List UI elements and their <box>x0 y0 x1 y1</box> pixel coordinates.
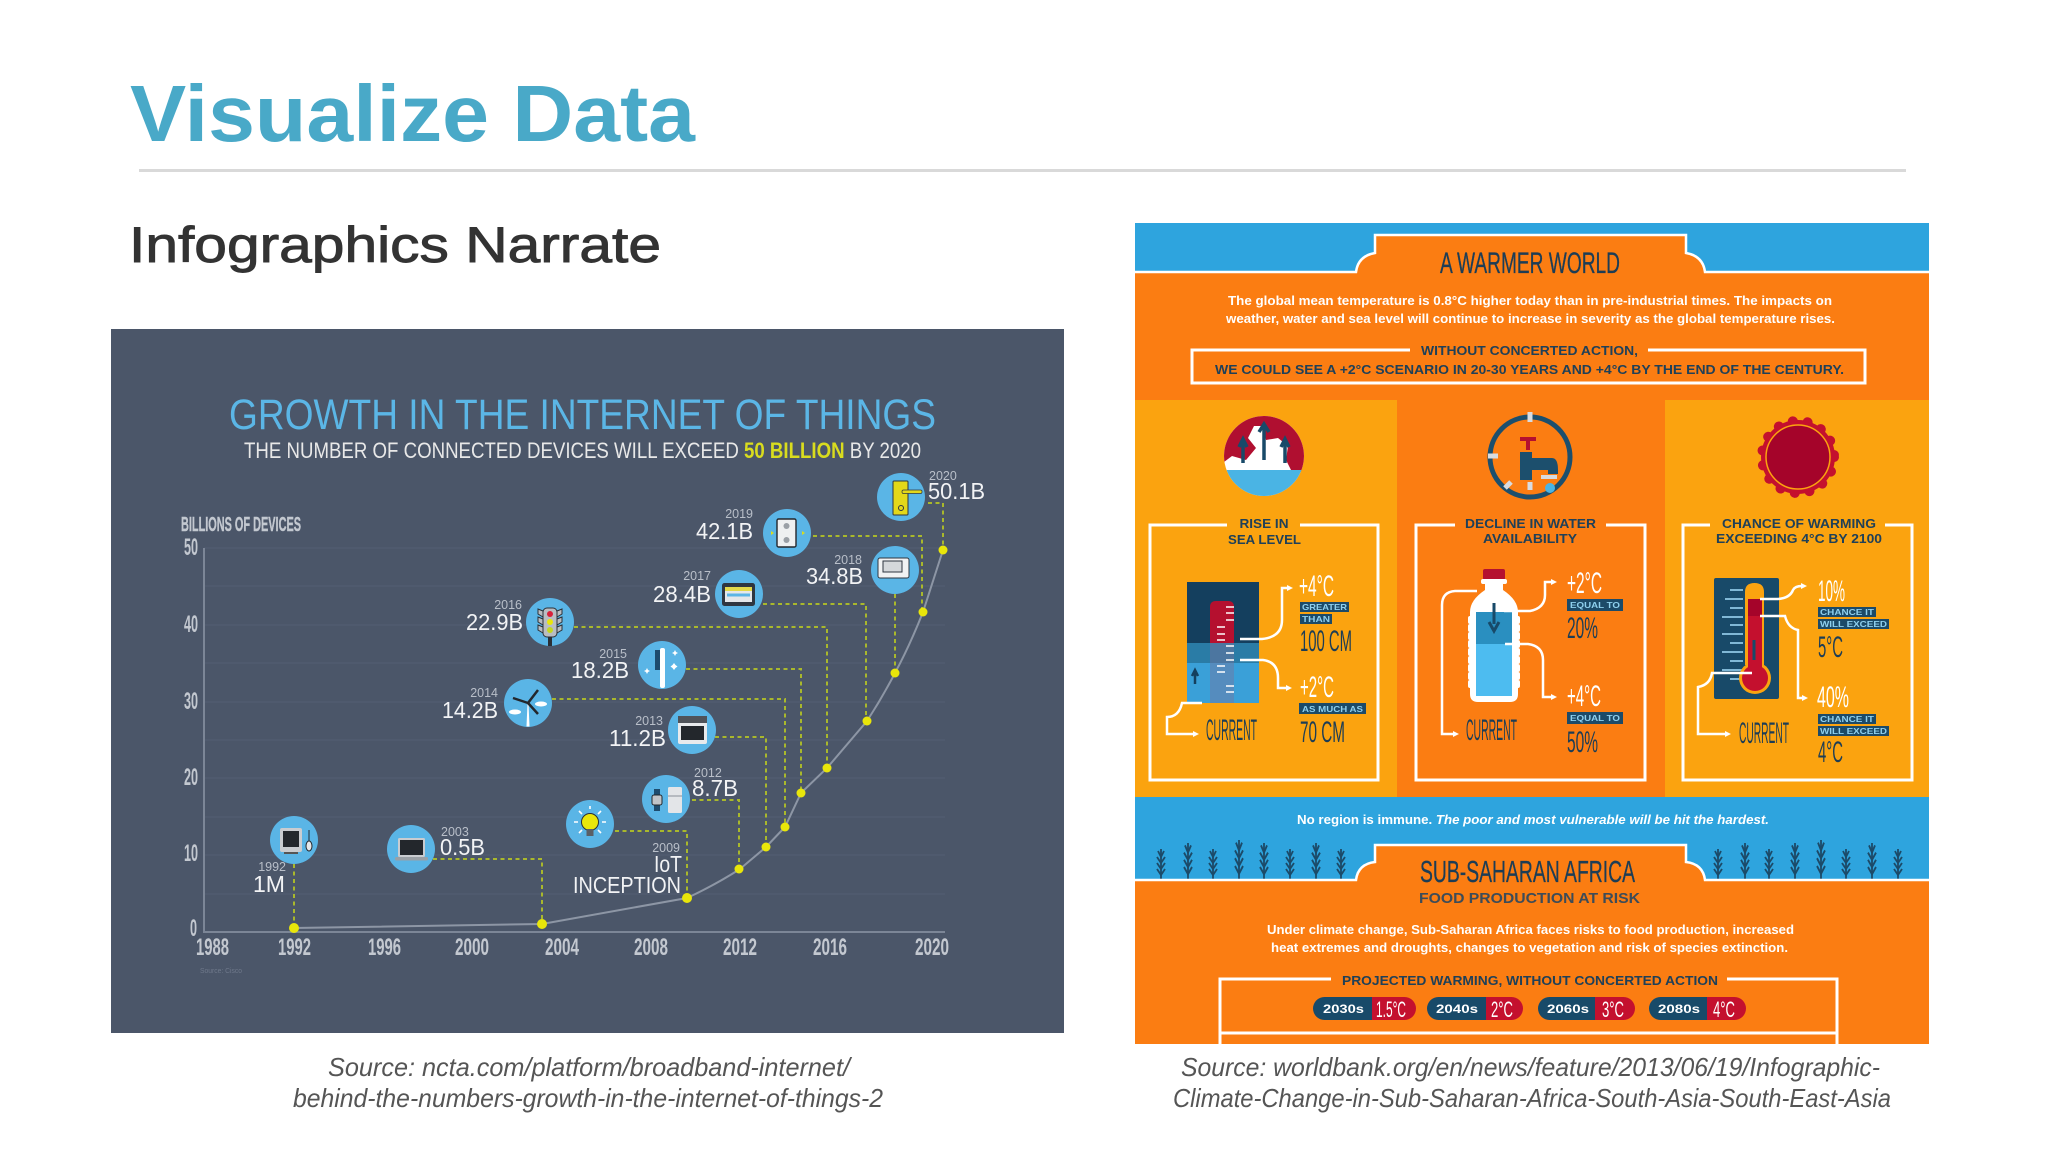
label 2020: 2020 <box>929 469 957 483</box>
label 2020: 50.1B <box>928 478 985 504</box>
stat: 40% chance will exceed 4°C: CHANCE IT <box>1820 714 1875 724</box>
label 2018: 34.8B <box>806 563 863 589</box>
pill: 2080s 4°C: 2080s <box>1658 1002 1700 1016</box>
africa paragraph: Under climate change, Sub-Saharan Africa faces risks to food production, increased <box>1267 922 1794 937</box>
panel: internet of things growth chart <box>111 329 1064 1033</box>
dotted connectors <box>294 503 943 928</box>
sea level gauge graphic <box>1187 582 1259 703</box>
x axis labels: 2004 <box>545 934 579 961</box>
x axis labels: 1988 <box>196 934 229 961</box>
box heading: decline in water availability: DECLINE IN WATER <box>1465 516 1597 531</box>
label 2015: 18.2B <box>571 657 629 683</box>
icons: wheat rows <box>1157 840 1902 879</box>
pill: 2080s 4°C: 4°C <box>1713 997 1735 1022</box>
y axis labels <box>184 534 198 942</box>
arrows: sea level connectors <box>1167 588 1288 734</box>
label 2012: 2012 <box>694 766 722 780</box>
icon: light bulb 2009 <box>566 800 614 848</box>
arrows: thermometer connectors <box>1698 586 1803 734</box>
caption: right source: Source: worldbank.org/en/news/feature/2013/06/19/Infographic- <box>1181 1052 1880 1082</box>
caption: right source <box>1173 1052 1891 1113</box>
x axis labels: 2000 <box>455 934 489 961</box>
pill: 2040s 2°C: 2°C <box>1491 997 1513 1022</box>
stat: 10% chance will exceed 5°C: WILL EXCEED <box>1820 619 1887 629</box>
stat: +4°C equal to 50%: 50% <box>1567 726 1598 759</box>
intro paragraph: The global mean temperature is 0.8°C higher today than in pre-industrial times. The impacts on <box>1228 293 1832 308</box>
icon: laptop 2003 <box>387 825 435 873</box>
heading: a warmer world: A WARMER WORLD <box>1440 247 1620 280</box>
x axis labels: 2008 <box>634 934 668 961</box>
icon: water bottle <box>1470 569 1518 702</box>
caption: left source <box>293 1052 884 1113</box>
x axis labels: 1996 <box>368 934 401 961</box>
label 2016: 22.9B <box>466 609 523 635</box>
stat: +4°C greater than 100 cm <box>1300 575 1351 652</box>
stat: +2°C equal to 20%: EQUAL TO <box>1570 600 1620 610</box>
top blue band <box>1135 223 1929 272</box>
y axis title: BILLIONS OF DEVICES <box>181 514 301 536</box>
icon: faucet <box>1488 412 1570 497</box>
x axis labels <box>196 934 949 961</box>
y axis labels: 0 <box>190 915 197 942</box>
stat: 10% chance will exceed 5°C: 5°C <box>1818 631 1843 664</box>
pill: 2060s 3°C: 2060s <box>1547 1002 1589 1016</box>
x axis labels: 2016 <box>813 934 847 961</box>
y axis labels: 40 <box>184 611 198 638</box>
label 2013: 2013 <box>635 714 663 728</box>
label 2017 <box>653 569 711 607</box>
stat: +2°C equal to 20%: +2°C <box>1567 567 1602 600</box>
panel: water availability column <box>1416 412 1645 780</box>
sub-saharan tab <box>1135 844 1929 882</box>
label 2009 IoT inception <box>573 841 682 898</box>
stat: 10% chance will exceed 5°C: 10% <box>1818 575 1845 608</box>
stat: +4°C greater than 100 cm: THAN <box>1302 614 1330 624</box>
pill: 2060s 3°C: 3°C <box>1602 997 1624 1022</box>
pill: 2040s 2°C: 2040s <box>1436 1002 1478 1016</box>
icon: toothbrush 2015 <box>638 641 686 689</box>
panel: sea level column: 100 CM <box>1300 625 1352 658</box>
box heading: decline in water availability <box>1416 516 1645 780</box>
subtitle: Infographics Narrate <box>129 217 661 273</box>
stat: +2°C equal to 20%: 20% <box>1567 612 1598 645</box>
stat: 40% chance will exceed 4°C <box>1817 686 1889 762</box>
panel: water availability column: CURRENT <box>1466 714 1517 747</box>
y axis labels: 20 <box>184 764 198 791</box>
icon: oven 2013 <box>668 706 716 754</box>
label 2019: 2019 <box>725 507 753 521</box>
icon: thermostat 2018 <box>871 546 919 594</box>
africa paragraph <box>1267 922 1794 955</box>
label 2016 <box>466 598 523 635</box>
icon: sun seal <box>1761 420 1835 494</box>
icon: traffic light 2016 <box>526 598 574 646</box>
box heading: rise in sea level: SEA LEVEL <box>1228 532 1301 547</box>
label 2019 <box>696 507 753 544</box>
africa paragraph: heat extremes and droughts, changes to vegetation and risk of species extinction. <box>1271 940 1788 955</box>
heading: sub-saharan africa: SUB-SAHARAN AFRICA <box>1420 854 1635 889</box>
label 2003: 0.5B <box>440 834 485 860</box>
label 2017: 2017 <box>683 569 711 583</box>
stat: +4°C equal to 50%: +4°C <box>1567 680 1601 713</box>
projected warming box: PROJECTED WARMING, WITHOUT CONCERTED ACTION <box>1342 973 1718 988</box>
icon: watch and fridge 2012 <box>642 775 690 823</box>
pill: 2030s 1.5°C: 1.5°C <box>1376 997 1406 1022</box>
stat: +4°C equal to 50% <box>1567 685 1623 752</box>
lower blue band <box>1135 797 1929 881</box>
y axis labels: 30 <box>184 688 198 715</box>
label 2009 IoT inception: INCEPTION <box>573 872 681 898</box>
stat: +2°C equal to 20% <box>1567 572 1623 638</box>
label 2016: 2016 <box>494 598 522 612</box>
label 2014: 14.2B <box>442 697 498 723</box>
box heading: chance of warming: EXCEEDING 4°C BY 2100 <box>1716 531 1882 546</box>
label 2018: 2018 <box>834 553 862 567</box>
stat: +2°C as much as 70 cm: 70 CM <box>1300 716 1345 749</box>
y axis labels: 10 <box>184 840 198 867</box>
caption: left source: Source: ncta.com/platform/broadband-internet/ <box>328 1052 853 1082</box>
x axis labels: 2020 <box>915 934 949 961</box>
panel: warming chance column: CURRENT <box>1739 717 1789 750</box>
label 2013 <box>609 714 666 751</box>
x axis labels: 1992 <box>278 934 311 961</box>
stat: 40% chance will exceed 4°C: 4°C <box>1818 736 1843 769</box>
icon: wall outlet 2019 <box>763 509 811 557</box>
label 2013: 11.2B <box>609 725 666 751</box>
stat: 10% chance will exceed 5°C <box>1818 580 1889 658</box>
icon: desktop 1992 <box>270 816 318 864</box>
projected warming box <box>1218 976 1838 1044</box>
stat: +4°C greater than 100 cm: +4°C <box>1299 570 1334 603</box>
callout: without concerted action <box>1192 343 1865 383</box>
box heading: rise in sea level <box>1150 516 1378 780</box>
stat: +4°C equal to 50%: EQUAL TO <box>1570 713 1620 723</box>
icon: door lock 2020 <box>877 473 925 521</box>
slide canvas <box>111 83 1929 1112</box>
label 2014: 2014 <box>470 686 498 700</box>
label 2003: 2003 <box>441 825 469 839</box>
pill: 2060s 3°C <box>1538 997 1635 1022</box>
pill: 2030s 1.5°C: 2030s <box>1323 1002 1364 1016</box>
callout: without concerted action: WITHOUT CONCERTED ACTION, <box>1421 343 1638 358</box>
arrows: water connectors <box>1442 582 1552 734</box>
stat: 40% chance will exceed 4°C: 40% <box>1817 681 1849 714</box>
pill: 2080s 4°C <box>1649 997 1746 1022</box>
caption: right source: Climate-Change-in-Sub-Saharan-Africa-South-Asia-South-East-Asia <box>1173 1083 1891 1113</box>
icon: wind turbine 2014 <box>504 679 552 727</box>
icon: tablet 2017 <box>715 570 763 618</box>
panel: sea level column: CURRENT <box>1206 714 1257 747</box>
title: Visualize Data <box>130 69 696 158</box>
stat: +4°C greater than 100 cm: GREATER <box>1302 602 1347 612</box>
stat: 40% chance will exceed 4°C: WILL EXCEED <box>1820 726 1887 736</box>
panel: sea level column <box>1135 400 1397 797</box>
stat: +2°C as much as 70 cm: +2°C <box>1300 671 1334 704</box>
box heading: chance of warming <box>1683 516 1912 780</box>
stat: 10% chance will exceed 5°C: CHANCE IT <box>1820 607 1875 617</box>
y axis labels: 50 <box>184 534 198 561</box>
icon: sea level globe <box>1224 416 1304 498</box>
stat: +2°C as much as 70 cm: AS MUCH AS <box>1302 704 1363 714</box>
x axis labels: 2012 <box>723 934 757 961</box>
box heading: chance of warming: CHANCE OF WARMING <box>1722 516 1876 531</box>
panel: a warmer world infographic <box>1130 223 1934 1050</box>
caption: left source: behind-the-numbers-growth-in-the-internet-of-things-2 <box>293 1083 884 1113</box>
stat: +2°C as much as 70 cm <box>1299 676 1366 742</box>
header tab <box>1130 235 1934 272</box>
label 2017: 28.4B <box>653 581 711 607</box>
label 1992 <box>253 860 286 897</box>
thermometer graphic <box>1714 578 1779 699</box>
intro paragraph: weather, water and sea level will continue to increase in severity as the global temperature rises. <box>1225 311 1835 326</box>
box heading: rise in sea level: RISE IN <box>1240 516 1288 531</box>
header rule <box>139 169 1906 172</box>
panel: warming chance column <box>1665 400 1929 797</box>
chart title: GROWTH IN THE INTERNET OF THINGS <box>229 391 936 439</box>
chart source note: Source: Cisco <box>200 968 242 975</box>
text: no region is immune: No region is immune. The poor and most vulnerable will be hit the hardest. <box>1297 812 1769 827</box>
label 2018 <box>806 553 863 589</box>
label 2012: 8.7B <box>692 775 738 801</box>
label 2015: 2015 <box>599 647 627 661</box>
label 1992: 1992 <box>258 860 286 874</box>
label 2014 <box>442 686 498 723</box>
label 2009 IoT inception: 2009 <box>652 841 680 855</box>
pill: 2040s 2°C <box>1427 997 1523 1022</box>
box heading: decline in water availability: AVAILABILITY <box>1483 531 1577 546</box>
intro paragraph <box>1225 293 1835 326</box>
pill: 2030s 1.5°C <box>1313 997 1416 1022</box>
chart subtitle: THE NUMBER OF CONNECTED DEVICES WILL EXCEED 50 BILLION BY 2020 <box>244 438 921 463</box>
growth curve <box>294 550 943 928</box>
label 2019: 42.1B <box>696 518 753 544</box>
data points <box>289 546 948 933</box>
subheading: food production at risk: FOOD PRODUCTION AT RISK <box>1419 890 1640 907</box>
callout: without concerted action: WE COULD SEE A +2°C SCENARIO IN 20-30 YEARS AND +4°C BY THE END OF THE CENTURY. <box>1215 362 1844 377</box>
label 1992: 1M <box>253 871 285 897</box>
label 2009 IoT inception: IoT <box>654 851 682 877</box>
